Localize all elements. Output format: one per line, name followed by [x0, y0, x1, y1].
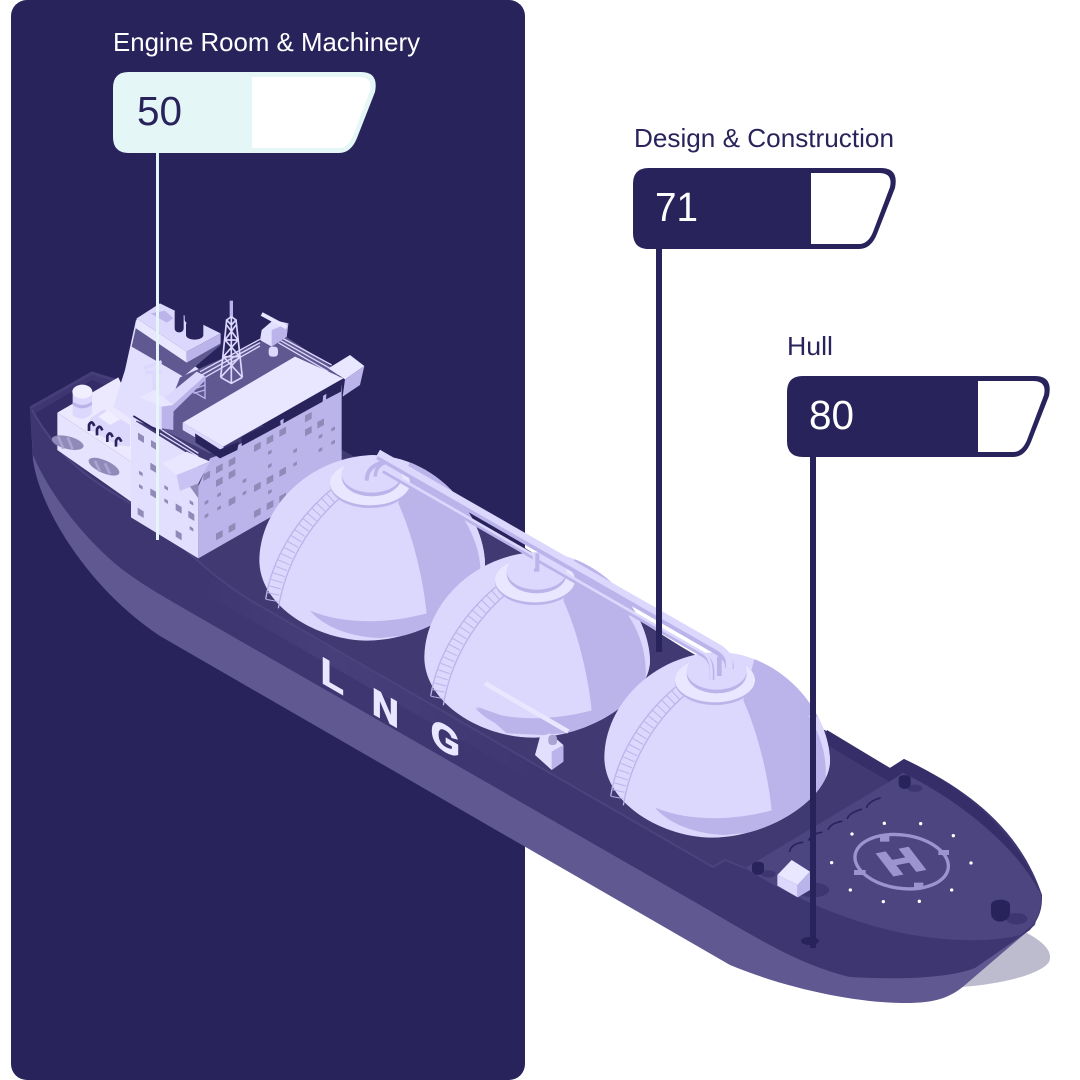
LNG band tint: [200, 571, 540, 785]
right bridge wing: [328, 355, 364, 397]
score card: design 71: 71: [655, 184, 698, 230]
left bridge wing lower: [162, 452, 210, 498]
background panel: [11, 0, 525, 1080]
score card: hull 80: 80: [809, 392, 854, 438]
top block: [136, 303, 221, 363]
main building left face: [131, 418, 198, 558]
crane device: [260, 314, 288, 357]
tank 2: [424, 552, 655, 738]
deck edge line: [32, 410, 745, 868]
stern well deck: [34, 380, 130, 498]
radar mast: [221, 301, 242, 384]
bow deck: [745, 773, 1041, 940]
deck crane: [477, 683, 568, 770]
LNG lettering on hull: G: [431, 711, 460, 768]
LNG lettering on hull: [321, 650, 460, 768]
leader line: hull: [801, 456, 819, 948]
helipad letter H: H: [869, 840, 933, 883]
funnels: [175, 303, 203, 340]
main building right face: [198, 385, 342, 558]
aft cylinder: [72, 385, 92, 419]
label: engine room & machinery: Engine Room & Machinery: [113, 27, 420, 57]
tower dark band: [132, 327, 221, 377]
label: hull: Hull: [787, 331, 833, 361]
helipad marks: [854, 835, 949, 889]
deck edge shadow: [133, 416, 158, 431]
LNG lettering on hull: L: [321, 650, 344, 703]
label: design & construction: Design & Construction: [634, 123, 894, 153]
bow rim: [822, 730, 1042, 900]
score card: design 71: [633, 168, 896, 249]
LNG lettering on hull: N: [372, 681, 399, 737]
left face windows: [138, 433, 194, 540]
leader line: design & construction: [656, 248, 662, 652]
bow details: helipad and fittings: [752, 775, 1027, 924]
upper deck: [163, 335, 342, 453]
tower body: [113, 320, 200, 430]
tank 1: [259, 455, 490, 641]
superstructure: [50, 301, 364, 558]
tank 3: [604, 652, 835, 838]
right face windows: [203, 412, 335, 540]
machinery with arches: [89, 409, 130, 447]
bridge roof: [183, 357, 343, 458]
hull side: [30, 373, 1042, 978]
midship deck band: [130, 400, 892, 868]
bridge wing left: [140, 362, 205, 430]
aft block: [57, 377, 137, 462]
small white deck box: [777, 860, 829, 897]
cast shadow of bow: [962, 932, 1050, 987]
lower hull stripe: [30, 373, 1042, 1003]
ship: LNG carrier illustration: [30, 301, 1050, 1003]
helipad dots: [830, 822, 973, 903]
deck ladder: [193, 378, 205, 398]
score card: engine room 50: [113, 72, 376, 153]
deck hatch dashes: [790, 798, 880, 851]
lifeboats: [50, 433, 122, 479]
stern rim: [30, 373, 118, 408]
helipad ring: [851, 829, 952, 895]
score card: engine room 50: 50: [137, 88, 182, 134]
bollards: [752, 775, 1027, 924]
railing lines: [160, 336, 332, 457]
pipes over tanks: [367, 453, 729, 680]
leader line: engine room: [156, 152, 159, 540]
score card: hull 80: [787, 376, 1050, 457]
